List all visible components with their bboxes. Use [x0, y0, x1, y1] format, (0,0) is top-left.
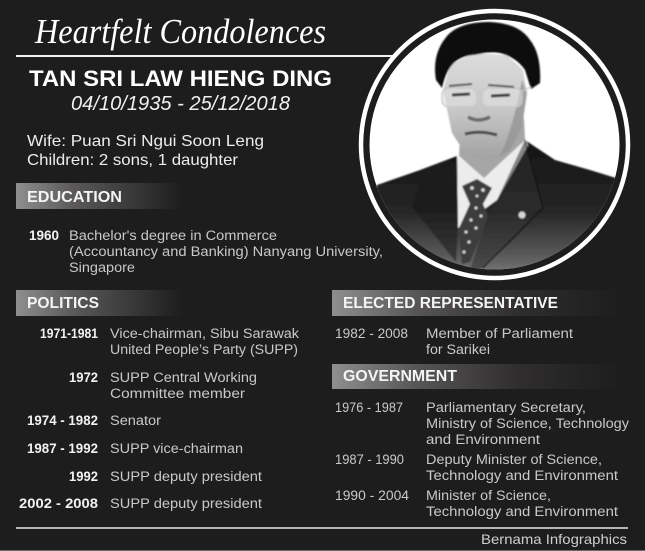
education entry: Singapore [69, 260, 135, 275]
elected representative heading: ELECTED REPRESENTATIVE [343, 295, 558, 312]
eyebrows [449, 84, 514, 87]
neck [459, 118, 525, 178]
life dates: 04/10/1935 - 25/12/2018 [71, 93, 290, 115]
face side shadow [500, 80, 527, 156]
elected representative heading band [332, 290, 620, 316]
politics heading: POLITICS [27, 295, 99, 312]
government timeline: Technology and Environment [426, 504, 618, 519]
lapel pin [518, 212, 526, 218]
government timeline: Technology and Environment [426, 468, 618, 483]
politics timeline: SUPP deputy president [110, 496, 262, 511]
politics timeline: 1992 [69, 469, 98, 484]
eyes [452, 94, 510, 96]
politics timeline: Senator [110, 413, 162, 428]
right lapel [470, 140, 543, 270]
panel: politics [16, 290, 299, 511]
footer rule [16, 527, 628, 529]
person name: TAN SRI LAW HIENG DING [29, 66, 332, 91]
elected representative entry: 1982 - 2008 [335, 326, 408, 341]
politics timeline [19, 326, 299, 511]
panel: elected representative [332, 290, 620, 357]
hair [435, 22, 540, 89]
education heading band [16, 183, 182, 209]
politics timeline: Vice-chairman, Sibu Sarawak [110, 326, 299, 341]
government timeline: 1976 - 1987 [335, 400, 403, 415]
panel: education [16, 183, 383, 275]
government heading: GOVERNMENT [343, 368, 458, 385]
government timeline: 1990 - 2004 [335, 488, 410, 503]
elected representative entry [335, 326, 573, 357]
government timeline [335, 400, 629, 519]
elected representative entry: for Sarikei [426, 342, 490, 357]
tie [459, 179, 492, 264]
mouth [465, 132, 497, 135]
title rule [16, 55, 394, 57]
education entry: 1960 [29, 228, 59, 243]
glasses [442, 87, 531, 107]
government timeline: Ministry of Science, Technology [426, 416, 629, 431]
elected representative entry: Member of Parliament [426, 326, 573, 341]
politics timeline: United People’s Party (SUPP) [110, 342, 298, 357]
politics heading band [16, 290, 182, 316]
left lapel [413, 200, 458, 262]
portrait [361, 11, 630, 285]
politics timeline: 1987 - 1992 [27, 441, 98, 456]
politics timeline: 1974 - 1982 [27, 413, 98, 428]
politics timeline: SUPP deputy president [110, 469, 262, 484]
government timeline: Minister of Science, [426, 488, 551, 503]
family details [27, 133, 264, 169]
nose [468, 117, 490, 120]
government timeline: and Environment [426, 432, 540, 447]
education heading: EDUCATION [27, 189, 122, 206]
face [442, 52, 527, 144]
jacket [376, 140, 615, 270]
family details: Children: 2 sons, 1 daughter [27, 152, 239, 169]
politics timeline: SUPP Central Working [110, 370, 257, 385]
education entry: Bachelor's degree in Commerce [69, 228, 277, 243]
shirt [457, 136, 528, 228]
credit: Bernama Infographics [481, 531, 627, 547]
politics timeline: 2002 - 2008 [19, 496, 99, 511]
politics timeline: SUPP vice-chairman [110, 441, 243, 456]
panel: government [332, 364, 629, 519]
politics timeline: 1971-1981 [40, 326, 98, 341]
government timeline: 1987 - 1990 [335, 452, 404, 467]
education entry: (Accountancy and Banking) Nanyang University, [69, 244, 383, 259]
title: Heartfelt Condolences [34, 12, 326, 51]
politics timeline: 1972 [69, 370, 98, 385]
politics timeline: Committee member [110, 386, 246, 401]
education entry [29, 228, 383, 275]
government timeline: Deputy Minister of Science, [426, 452, 602, 467]
government timeline: Parliamentary Secretary, [426, 400, 586, 415]
government heading band [332, 364, 620, 389]
family details: Wife: Puan Sri Ngui Soon Leng [27, 133, 264, 150]
